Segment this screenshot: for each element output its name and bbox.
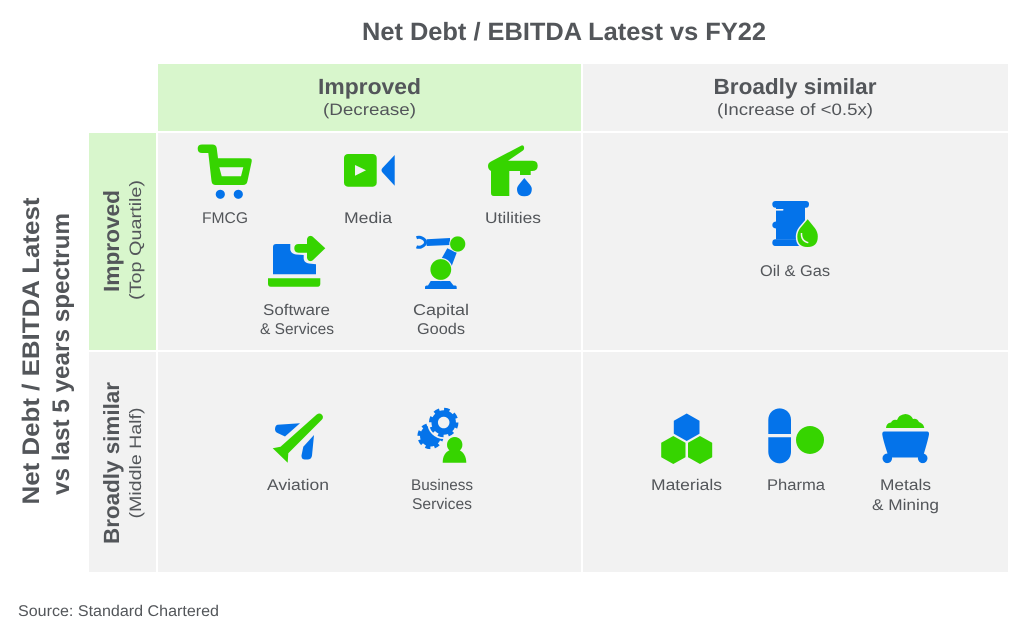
icon: plane bbox=[273, 414, 323, 463]
sector: Materials: Materials bbox=[651, 477, 722, 494]
sector: Pharma bbox=[767, 408, 825, 494]
sector: Media: Media bbox=[344, 210, 392, 227]
icon: hexagons bbox=[662, 414, 712, 464]
row header: improved bbox=[89, 133, 156, 350]
icon: robotic arm bbox=[416, 236, 466, 289]
sector: Capital Goods: Capital bbox=[413, 302, 469, 319]
column header: improved: Improved bbox=[318, 74, 421, 99]
sector: Oil & Gas: Oil & Gas bbox=[760, 263, 830, 280]
column header: improved bbox=[158, 64, 581, 131]
icon: mine cart bbox=[882, 414, 929, 463]
sector: Software & Services: & Services bbox=[260, 321, 334, 338]
sector: Software & Services bbox=[260, 236, 334, 338]
sector: Utilities bbox=[485, 145, 541, 227]
sector: Materials bbox=[651, 414, 722, 494]
sector: Capital Goods bbox=[413, 236, 469, 338]
sector: Business Services bbox=[411, 406, 473, 513]
row header: improved: (Top Quartile) bbox=[127, 180, 145, 300]
sector: FMCG: FMCG bbox=[202, 210, 248, 227]
sector: Pharma: Pharma bbox=[767, 477, 825, 494]
row header: improved: Improved bbox=[99, 190, 124, 292]
vertical axis title bbox=[18, 198, 75, 504]
vertical axis title: vs last 5 years spectrum bbox=[48, 213, 75, 495]
sector: Oil & Gas bbox=[760, 201, 830, 280]
icon: oil barrel with drop bbox=[772, 201, 818, 247]
sector: Metals & Mining: Metals bbox=[880, 477, 931, 494]
icon: pill and tablet bbox=[768, 408, 824, 463]
sector: Media bbox=[344, 154, 395, 227]
title: Net Debt / EBITDA Latest vs FY22 bbox=[362, 18, 766, 46]
column header: broadly similar: (Increase of <0.5x) bbox=[717, 101, 873, 119]
icon: video camera bbox=[344, 154, 395, 187]
vertical axis title: Net Debt / EBITDA Latest bbox=[18, 198, 45, 504]
sector: Business Services: Services bbox=[412, 496, 472, 513]
icon: tap bbox=[488, 145, 538, 196]
sector: Utilities: Utilities bbox=[485, 210, 541, 227]
icon: shopping cart bbox=[198, 144, 252, 199]
sector: Business Services: Business bbox=[411, 477, 473, 494]
source note: Source: Standard Chartered bbox=[18, 603, 219, 620]
panel: improved / similar bbox=[158, 352, 581, 572]
panel: improved / improved bbox=[158, 133, 581, 350]
panel: similar / improved bbox=[583, 133, 1008, 350]
panel: similar / similar bbox=[583, 352, 1008, 572]
column header: improved: (Decrease) bbox=[323, 101, 416, 119]
sector: FMCG bbox=[198, 144, 252, 227]
sector: Capital Goods: Goods bbox=[417, 321, 465, 338]
icon: laptop with arrow bbox=[268, 236, 325, 287]
column header: broadly similar: Broadly similar bbox=[714, 74, 877, 99]
column header: broadly similar bbox=[583, 64, 1008, 131]
sector: Metals & Mining: & Mining bbox=[872, 497, 939, 514]
sector: Aviation bbox=[267, 414, 329, 494]
row header: broadly similar bbox=[89, 352, 156, 572]
row header: broadly similar: Broadly similar bbox=[99, 382, 124, 544]
row header: broadly similar: (Middle Half) bbox=[127, 408, 145, 518]
sector: Aviation: Aviation bbox=[267, 477, 329, 494]
icon: gears and person bbox=[419, 406, 467, 463]
sector: Software & Services: Software bbox=[263, 302, 330, 319]
sector: Metals & Mining bbox=[872, 414, 939, 514]
